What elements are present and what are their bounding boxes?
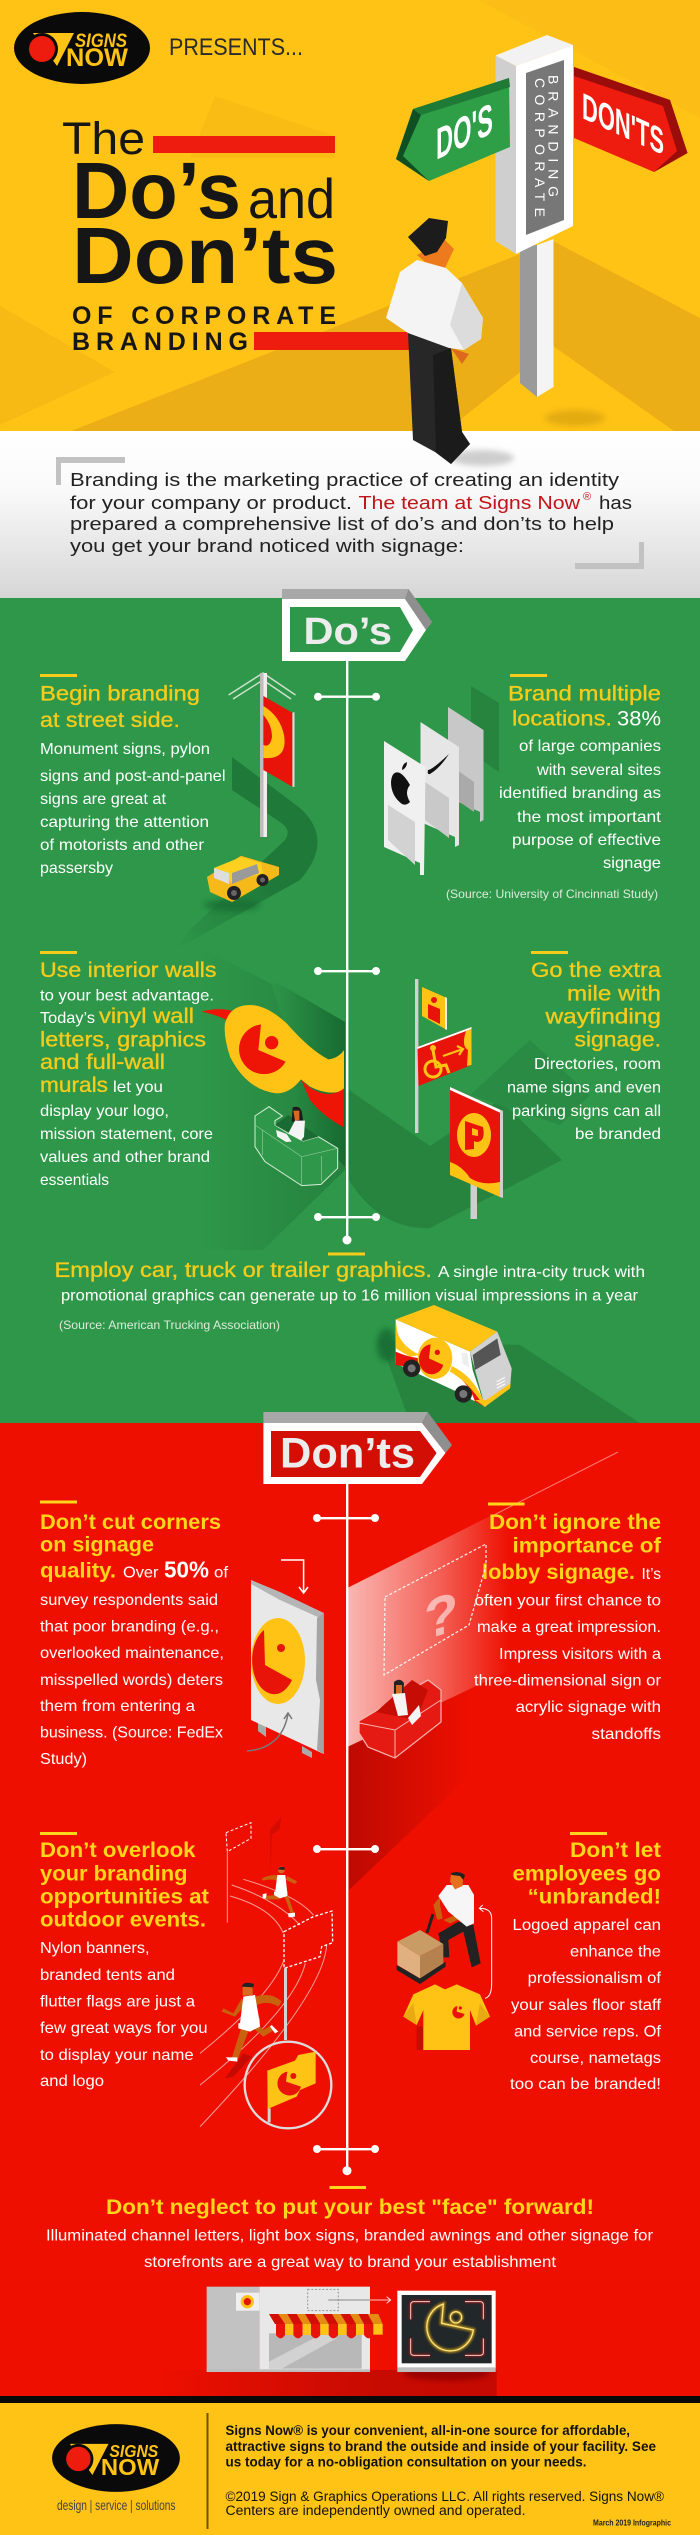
text: brand multiple locations: with several sites <box>536 762 661 779</box>
text: use interior walls: to your best advantage. <box>40 988 214 1005</box>
text: employ truck graphics: A single intra-city truck with <box>438 1264 645 1281</box>
reception desk <box>255 1107 338 1186</box>
text: begin branding: capturing the attention <box>40 814 209 831</box>
text: brand multiple locations: of large companies <box>519 738 661 755</box>
footer logo: NOW <box>101 2454 160 2480</box>
do's sign: Do’s <box>304 611 392 653</box>
text: don't ignore lobby signage: Impress visitors with a <box>499 1646 661 1663</box>
header panel <box>0 0 700 431</box>
title: Don’ts <box>72 211 338 300</box>
text: don't let employees go unbranded: professionalism of <box>528 1970 662 1987</box>
text: brand multiple locations: (Source: University of Cincinnati Study) <box>446 887 658 901</box>
footer text: ©2019 Sign & Graphics Operations LLC. All rights reserved. Signs Now® <box>226 2489 664 2504</box>
text: brand multiple locations: 38% <box>617 707 661 731</box>
text: brand multiple locations: Brand multiple <box>508 682 661 706</box>
intro panel <box>0 431 700 598</box>
text: don't overlook outdoor events: Don’t overlook <box>40 1838 196 1862</box>
do's sign <box>282 589 432 661</box>
text: don't let employees go unbranded: and service reps. Of <box>514 2024 662 2041</box>
text: don't cut corners <box>40 1500 229 1768</box>
footer text: attractive signs to brand the outside and inside of your facility. See <box>226 2439 656 2454</box>
arrow: top <box>281 1560 308 1593</box>
text: use interior walls: murals <box>40 1073 108 1097</box>
intro text: for your company or product. <box>70 493 352 513</box>
text: employ truck graphics: (Source: American Trucking Association) <box>59 1318 280 1332</box>
icon: worn sign <box>247 1560 324 1758</box>
text: wayfinding <box>507 951 661 1143</box>
logo <box>14 12 150 84</box>
title: The <box>62 113 145 164</box>
text: don't cut corners: business. (Source: FedEx <box>40 1725 223 1742</box>
icon: delivery truck <box>377 1305 512 1407</box>
icon: taxi car <box>204 856 279 911</box>
intro text: Branding is the marketing practice of creating an identity <box>70 470 619 490</box>
text: don't ignore lobby signage: It’s <box>642 1566 661 1583</box>
signpost <box>396 35 688 426</box>
reception desk <box>359 1680 441 1758</box>
text: don't ignore lobby signage: often your first chance to <box>474 1593 661 1610</box>
icon: storefront and illuminated sign <box>157 2287 497 2396</box>
footer logo: SIGNS <box>109 2441 158 2461</box>
logo: SIGNS <box>75 31 127 52</box>
intro text: has <box>599 493 632 513</box>
text: don't ignore lobby signage <box>474 1502 662 1743</box>
text: employ truck graphics: promotional graphics can generate up to 16 million visual impressions in a year <box>61 1288 639 1305</box>
text: don't cut corners: misspelled words) deters <box>40 1672 223 1689</box>
title: BRANDING <box>72 328 248 356</box>
timeline <box>313 1484 379 2175</box>
restroom sign <box>422 987 447 1030</box>
text: best face forward <box>46 2186 654 2271</box>
lobby floor shadow <box>349 1690 470 1890</box>
text: don't ignore lobby signage: acrylic signage with <box>516 1699 661 1716</box>
text: begin branding: Monument signs, pylon <box>40 741 210 758</box>
text: brand multiple locations: signage <box>603 855 661 872</box>
post label text: CORPORATE <box>532 78 548 217</box>
text: don't ignore lobby signage: importance of <box>512 1534 662 1558</box>
text: use interior walls: display your logo, <box>40 1103 169 1120</box>
text: use interior walls: Use interior walls <box>40 958 216 982</box>
icon: brand signs apple and nike <box>384 686 499 875</box>
text: wayfinding: Directories, room <box>534 1056 661 1073</box>
text: don't cut corners: Over <box>123 1565 159 1582</box>
text: wayfinding: be branded <box>575 1126 661 1143</box>
text: employ truck graphics: Employ car, truck or trailer graphics. <box>54 1258 432 1282</box>
text: don't let employees go unbranded <box>510 1832 662 2093</box>
arrow <box>479 1905 492 1998</box>
footer logo <box>52 2424 180 2492</box>
footer tagline: design | service | solutions <box>57 2497 176 2513</box>
text: don't cut corners: 50% <box>164 1557 209 1583</box>
text: use interior walls: values and other brand <box>40 1149 210 1166</box>
text: don't ignore lobby signage: lobby signage. <box>482 1560 635 1584</box>
timeline <box>314 661 380 1244</box>
text: don't let employees go unbranded: “unbranded! <box>528 1885 661 1909</box>
intro text: The team at Signs Now <box>358 493 581 513</box>
road shadow <box>175 757 318 950</box>
text: use interior walls: letters, graphics <box>40 1028 206 1052</box>
text: use interior walls: mission statement, core <box>40 1126 213 1143</box>
text: wayfinding: parking signs can all <box>512 1103 661 1120</box>
title: OF CORPORATE <box>72 302 336 330</box>
logo: NOW <box>66 44 128 72</box>
bracket bottom right <box>575 542 644 569</box>
text: don't ignore lobby signage: standoffs <box>592 1726 661 1743</box>
title: Do’s <box>72 146 241 235</box>
text: begin branding: signs and post-and-panel <box>40 768 226 785</box>
text: don't cut corners: that poor branding (e.g., <box>40 1619 219 1636</box>
text: don't overlook outdoor events: to display your name <box>40 2047 194 2064</box>
runner far <box>262 1867 297 1917</box>
lobby wall <box>347 1506 510 1747</box>
text: don't cut corners: them from entering a <box>40 1698 195 1715</box>
text: begin branding <box>40 674 226 877</box>
intro text: you get your brand noticed with signage: <box>70 536 464 556</box>
text: begin branding: signs are great at <box>40 791 167 808</box>
text: use interior walls: vinyl wall <box>99 1004 194 1028</box>
text: don't cut corners: on signage <box>40 1533 154 1557</box>
text: brand multiple locations: purpose of effective <box>512 832 661 849</box>
text: brand multiple locations: the most important <box>517 809 662 826</box>
text: begin branding: Begin branding <box>40 682 200 706</box>
text: brand multiple locations: identified branding as <box>499 785 661 802</box>
icon: wayfinding signs <box>415 979 503 1219</box>
icon: runners and flags <box>200 1817 333 2128</box>
do's arrow sign <box>396 78 510 181</box>
post label text <box>532 75 562 217</box>
truck floor shadow <box>380 1340 640 1423</box>
don'ts sign <box>263 1412 452 1484</box>
text: begin branding: of motorists and other <box>40 837 205 854</box>
text: use interior walls: Today’s <box>40 1010 95 1027</box>
text: don't cut corners: survey respondents said <box>40 1592 218 1609</box>
footer text: Signs Now® is your convenient, all-in-one source for affordable, <box>226 2423 630 2438</box>
text: begin branding: passersby <box>40 860 113 877</box>
text: don't overlook outdoor events: outdoor events. <box>40 1908 206 1932</box>
do's arrow sign: DO'S <box>436 93 493 169</box>
don'ts arrow sign <box>574 67 688 172</box>
text: brand multiple locations: locations. <box>512 707 612 731</box>
text: don't ignore lobby signage: three-dimensional sign or <box>474 1673 662 1690</box>
text: use interior walls: essentials <box>40 1172 109 1189</box>
text: don't let employees go unbranded: course, nametags <box>530 2050 661 2067</box>
icon: worker and branded shirt <box>397 1872 492 2050</box>
text: don't let employees go unbranded: employees go <box>512 1862 661 1886</box>
text: don't let employees go unbranded: too can be branded! <box>510 2076 661 2093</box>
text: don't ignore lobby signage: make a great impression. <box>477 1619 661 1636</box>
footer text: March 2019 Infographic <box>593 2518 671 2528</box>
text: best face forward: Illuminated channel letters, light box signs, branded awnings and other signage for <box>46 2228 654 2245</box>
awning <box>269 2314 383 2338</box>
text: wayfinding: Go the extra <box>531 958 661 982</box>
text: begin branding: at street side. <box>40 708 180 732</box>
right floor shadow <box>349 1090 562 1228</box>
arrow: bottom <box>247 1713 292 1751</box>
worker with hand truck <box>397 1872 481 1984</box>
icon: wall mural and reception desk <box>202 1005 344 1186</box>
accessibility sign <box>418 1027 472 1086</box>
footer band <box>0 2396 700 2535</box>
post label text: BRANDING <box>546 75 562 197</box>
arrow <box>328 2298 370 2301</box>
text: don't overlook outdoor events: few great ways for you <box>40 2020 208 2037</box>
text: don't cut corners: overlooked maintenance, <box>40 1645 224 1662</box>
text: don't let employees go unbranded: Logoed apparel can <box>512 1917 661 1934</box>
text: best face forward: Don’t neglect to put your best "face" forward! <box>106 2195 594 2219</box>
text: brand multiple locations <box>446 674 662 901</box>
text: use interior walls: let you <box>113 1079 163 1096</box>
text: don't cut corners: Study) <box>40 1751 87 1768</box>
text: wayfinding: mile with <box>567 982 661 1006</box>
text: don't overlook outdoor events: flutter flags are just a <box>40 1994 195 2011</box>
text: don't overlook outdoor events: and logo <box>40 2073 104 2090</box>
panel: do's <box>0 589 700 1423</box>
intro text: ® <box>583 491 591 503</box>
don'ts sign: Don’ts <box>280 1430 415 1478</box>
intro text <box>70 470 632 556</box>
text: don't let employees go unbranded: enhance the <box>570 1944 661 1961</box>
text: wayfinding: signage. <box>574 1028 661 1052</box>
text: wayfinding: name signs and even <box>507 1080 661 1097</box>
title <box>62 113 410 356</box>
t-shirt <box>403 1984 490 2050</box>
text: don't cut corners: of <box>214 1565 229 1582</box>
text: don't overlook outdoor events: Nylon banners, <box>40 1940 150 1957</box>
light box <box>397 2291 496 2381</box>
intro text: prepared a comprehensive list of do’s and don’ts to help <box>70 514 614 534</box>
text: don't let employees go unbranded: your sales floor staff <box>511 1997 662 2014</box>
parking sign <box>450 1087 503 1219</box>
icon: street sign <box>229 673 296 837</box>
footer text <box>226 2423 671 2528</box>
man figure <box>386 218 514 466</box>
icon: lobby sign placeholder and reception desk: ? <box>424 1580 458 1653</box>
text: don't let employees go unbranded: Don’t let <box>570 1838 661 1862</box>
panel: don'ts <box>0 1412 700 2396</box>
text: use interior walls: and full-wall <box>40 1050 165 1074</box>
text: wayfinding: wayfinding <box>544 1005 661 1029</box>
text: don't overlook outdoor events <box>40 1832 209 2090</box>
text: use interior walls <box>40 951 216 1189</box>
footer text: us today for a no-obligation consultation on your needs. <box>226 2455 586 2470</box>
text: don't overlook outdoor events: branded tents and <box>40 1967 175 1984</box>
bracket top left <box>56 457 125 485</box>
presents label: PRESENTS... <box>169 34 303 61</box>
text: don't cut corners: quality. <box>40 1559 116 1583</box>
runner near <box>222 1983 282 2078</box>
text: don't cut corners: Don’t cut corners <box>40 1510 221 1534</box>
icon: lobby sign placeholder and reception desk <box>359 1544 486 1758</box>
text: don't overlook outdoor events: your branding <box>40 1862 188 1886</box>
mural wall shadow <box>200 947 345 1250</box>
text: employ truck graphics <box>54 1252 645 1332</box>
text: don't ignore lobby signage: Don’t ignore the <box>489 1510 661 1534</box>
text: don't overlook outdoor events: opportunities at <box>40 1885 209 1909</box>
text: best face forward: storefronts are a great way to brand your establishment <box>144 2254 557 2271</box>
footer text: Centers are independently owned and operated. <box>226 2503 526 2518</box>
title: and <box>248 167 335 230</box>
